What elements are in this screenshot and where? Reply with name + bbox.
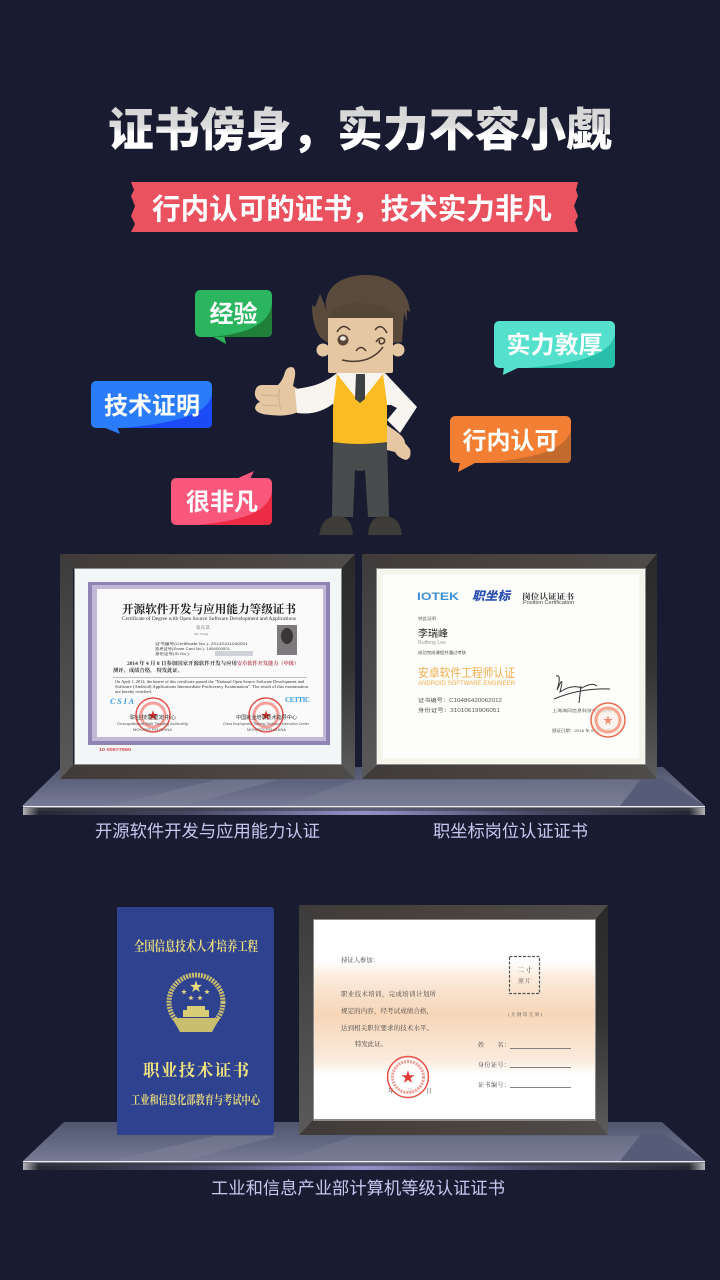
certificate paper: 10 00677550	[99, 747, 132, 752]
certificate paper: On April 1, 2014, the bearer of this certificate passed the "National Open Source Software Development and	[115, 679, 304, 685]
certificate paper: 证书编号(Certificate No.): 20142411040001	[155, 641, 248, 646]
blue certificate booklet: 全国信息技术人才培养工程	[134, 938, 258, 954]
speech bubble: 行内认可: 行内认可	[462, 428, 558, 455]
certificate paper: 开源软件开发与应用能力等级证书	[122, 602, 296, 616]
certificate paper: 颁证日期：2016 年 9 月 21 日	[552, 727, 611, 733]
certificate paper: Occupational Skill Testing Authority	[117, 721, 188, 726]
frame	[362, 554, 657, 779]
certificate paper: CETTIC	[285, 696, 310, 704]
certificate paper: 岗位认证证书	[522, 591, 575, 601]
framed certificate 3	[299, 905, 608, 1135]
caption: certificate 1: 开源软件开发与应用能力认证	[95, 821, 320, 841]
certificate paper: Certificate of Degree with Open Source Software Development and Applications	[122, 617, 296, 622]
certificate paper: 中国就业培训技术指导中心	[236, 714, 297, 721]
speech bubble: 技术证明: 技术证明	[104, 393, 200, 420]
emblem	[169, 975, 223, 1032]
certificate paper: ANDROID SOFTWARE ENGINEER	[418, 680, 515, 687]
certificate paper: 职业技能鉴定中心	[130, 714, 176, 721]
shelf 2	[23, 1122, 705, 1170]
speech bubble: 实力敦厚: 实力敦厚	[506, 332, 602, 359]
certificate paper: ★	[603, 716, 613, 727]
framed certificate 2	[362, 554, 657, 779]
frame	[299, 905, 608, 1135]
certificate paper: 李瑞峰	[418, 627, 448, 640]
shirt and right arm	[333, 373, 417, 460]
certificate paper: 身份证号：	[478, 1061, 510, 1069]
certificate paper: 证书编号：	[478, 1081, 510, 1089]
certificate paper: 职业技术培训，完成培训计划所	[341, 989, 436, 998]
certificate paper: ★	[148, 710, 158, 722]
certificate paper: ★	[260, 710, 272, 722]
caption: certificate 2: 职坐标岗位认证证书	[433, 821, 588, 841]
certificate paper: 持证人参加：	[341, 955, 379, 964]
certificate paper: CSIA	[110, 697, 135, 706]
certificate paper: ★	[401, 1069, 415, 1085]
certificate paper: 规定的内容，经考试成绩合格，	[341, 1006, 433, 1015]
certificate paper: 身份证号：31010619906051	[418, 707, 500, 714]
emblem: ★	[181, 989, 187, 996]
emblem: ★	[204, 989, 210, 996]
caption: certificate 3: 工业和信息产业部计算机等级认证证书	[211, 1178, 505, 1198]
certificate paper: Position Certification	[523, 600, 574, 606]
blue certificate booklet: 工业和信息化部教育与考试中心	[131, 1092, 262, 1107]
certificate paper: Ruifeng Lee	[418, 640, 446, 646]
certificate paper: 张东景	[196, 624, 210, 631]
speech bubble: 实力敦厚	[494, 321, 615, 375]
certificate paper: Ms. Wang	[194, 632, 208, 636]
certificate paper: 测评，成绩合格， 特发此证。	[113, 666, 183, 675]
certificate paper: 姓 名：	[478, 1041, 510, 1049]
certificate paper: MOHRSS P.R.CHINA	[133, 727, 172, 732]
certificate paper: Software (Android) Applications Intermediate Proficiency Examination". The result of this examination	[115, 684, 308, 689]
certificate paper: 2014 年 4 月 8 日参加国家开源软件开发与应用	[127, 659, 237, 667]
pants and shoes	[319, 442, 402, 535]
certificate paper: 特发此证。	[355, 1039, 387, 1048]
emblem: ★	[188, 995, 194, 1002]
certificate paper: 成功完成课程并通过考核	[418, 650, 466, 655]
certificate paper	[74, 568, 342, 765]
certificate paper: 身份证号(ID No.):	[155, 651, 190, 656]
speech bubble: 经验	[195, 290, 272, 344]
frame	[60, 554, 355, 779]
certificate paper: China Employment Training Technical Instruction Center	[223, 721, 310, 726]
certificate paper: 安卓软件工程师认证	[418, 665, 515, 680]
yellow vest	[333, 374, 387, 444]
speech bubble: 技术证明	[91, 381, 212, 434]
certificate paper: 证书编号：C10486420062012	[418, 697, 502, 704]
certificate paper: 达到相关职位要求的技术水平。	[341, 1023, 433, 1032]
blue certificate booklet: 职业技术证书	[143, 1060, 250, 1080]
blue certificate booklet	[117, 907, 274, 1135]
emblem: ★	[189, 979, 203, 994]
speech bubble: 很非凡	[171, 471, 272, 525]
emblem: ★	[197, 995, 203, 1002]
certificate paper: 照 片	[518, 977, 531, 985]
left arm with thumb up	[255, 367, 337, 416]
certificate paper: IOTEK	[417, 591, 459, 603]
speech bubble: 行内认可	[450, 416, 571, 472]
speech bubble: 很非凡: 很非凡	[186, 489, 258, 516]
certificate paper	[313, 919, 596, 1121]
certificate paper: 安卓软件开发能力（中级）	[237, 659, 299, 667]
head with hair and face	[312, 275, 410, 373]
certificate paper: (无钢印无效)	[508, 1011, 542, 1018]
banner: subtitle ribbon: 行内认可的证书，技术实力非凡	[152, 193, 552, 226]
certificate paper: 职坐标	[472, 589, 512, 603]
certificate paper	[376, 568, 646, 765]
speech bubble: 经验: 经验	[210, 300, 258, 328]
certificate paper: 准考证号(Exam Card No.): 1404000001	[155, 646, 230, 651]
banner: subtitle ribbon	[131, 182, 578, 232]
black tie	[355, 374, 365, 403]
title: 证书傍身，实力不容小觑	[108, 104, 612, 156]
certificate paper: 年 月 日	[388, 1087, 432, 1095]
illustration: winking man with thumbs up	[255, 275, 417, 535]
certificate paper: are hereby certified.	[115, 689, 152, 694]
certificate paper: MOHRSS P.R.CHINA	[247, 727, 286, 732]
shelf 1	[22, 767, 705, 815]
framed certificate 1	[60, 554, 355, 779]
certificate paper: 上海海同信息科技有限公司	[552, 707, 612, 713]
certificate paper: 二 寸	[517, 965, 532, 974]
certificate paper: 特此证明	[418, 616, 436, 621]
